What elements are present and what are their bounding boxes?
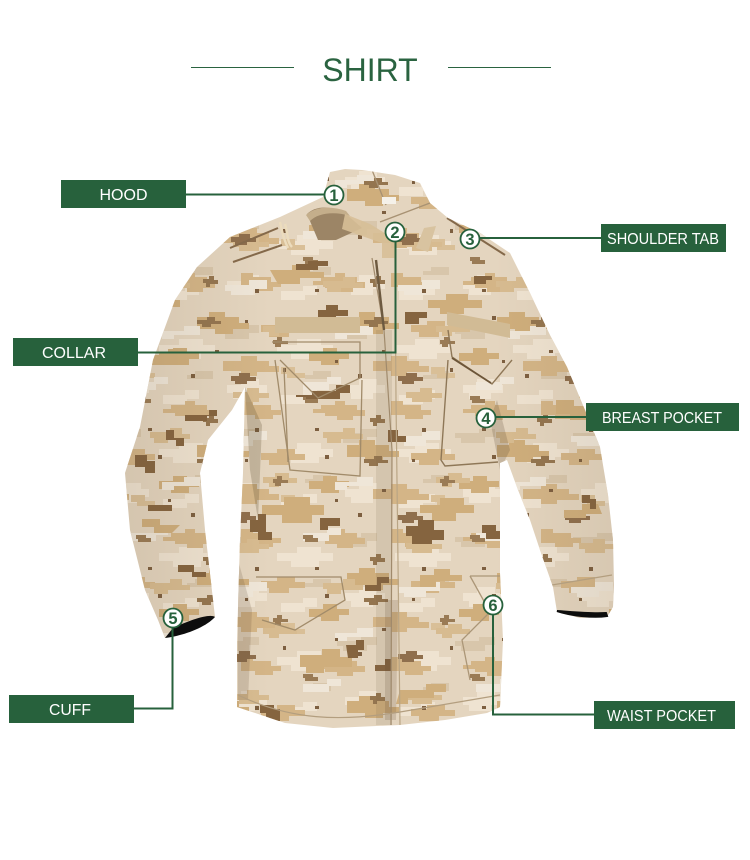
callout 5: cuff: CUFF [49, 702, 91, 719]
velcro patches [275, 312, 510, 338]
lower right waist pocket [462, 576, 500, 680]
left breast pocket [272, 342, 362, 476]
callout 1: hood [61, 180, 344, 208]
callout 6: waist pocket: 6 [488, 597, 498, 615]
large tan camo patches [140, 265, 602, 704]
placket [372, 258, 400, 725]
callout 2: collar [13, 222, 404, 366]
soft body shading [125, 266, 614, 638]
callout 5: cuff [9, 608, 182, 723]
right breast pocket [441, 330, 512, 466]
callout 4: breast pocket: 4 [481, 410, 491, 428]
callout 6: waist pocket [484, 596, 735, 729]
black cuff openings [165, 611, 607, 638]
callout 1: hood: 1 [329, 187, 339, 205]
jacket illustration [120, 165, 620, 735]
callout 6: waist pocket: WAIST POCKET [607, 708, 716, 725]
callout 3: shoulder tab: 3 [465, 231, 475, 249]
callout 4: breast pocket [476, 403, 739, 431]
hood opening and drawcord [280, 207, 362, 248]
collar [342, 170, 436, 258]
hem and cuffs [238, 575, 612, 718]
callout 3: shoulder tab [460, 224, 726, 252]
shoulder tabs [230, 218, 505, 262]
callout 1: hood: HOOD [100, 187, 148, 204]
callout 3: shoulder tab: SHOULDER TAB [607, 231, 719, 248]
lower left waist pocket [256, 577, 345, 630]
callout 4: breast pocket: BREAST POCKET [602, 410, 722, 427]
heading text: SHIRT [322, 52, 418, 88]
callout 2: collar: COLLAR [42, 345, 106, 362]
callout 5: cuff: 5 [168, 610, 178, 628]
dark brown camo patches [135, 261, 596, 721]
callout 2: collar: 2 [390, 224, 400, 242]
